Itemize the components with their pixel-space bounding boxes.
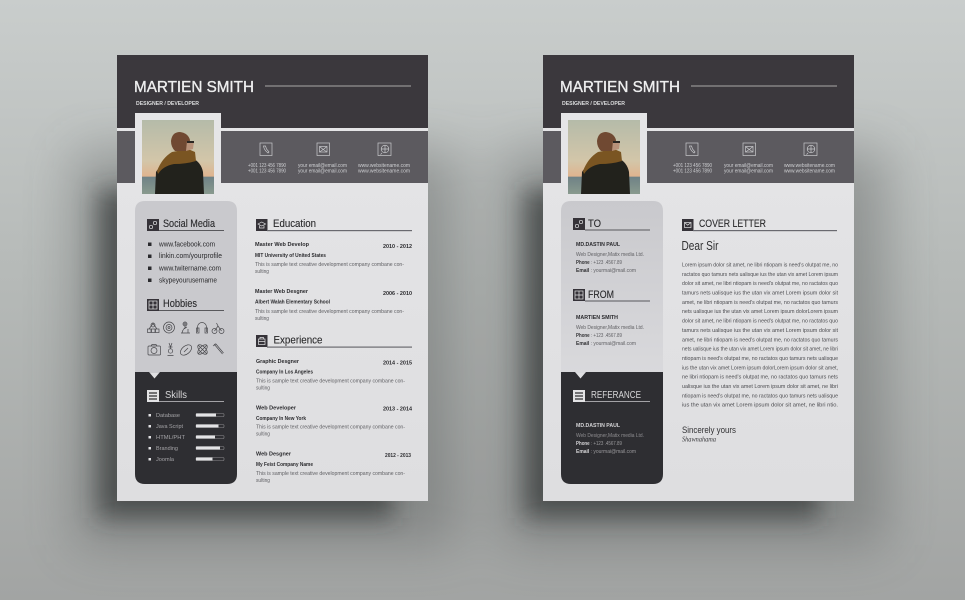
entry: master web designer: Albert Walah Elementary School [255, 300, 331, 306]
section: from [573, 289, 650, 347]
sidebar dark section [561, 372, 663, 484]
social rule [159, 230, 224, 231]
sheet shadows [75, 150, 886, 545]
panel: resume sheet [117, 55, 428, 501]
skill: database: Database [156, 413, 180, 419]
phone numbers: +001 123 456 7890 [248, 169, 286, 175]
from details: Web Designer,Matix media Ltd. [576, 325, 644, 331]
entry: graphic designer: sulting [256, 386, 270, 392]
from rule [585, 300, 650, 302]
letter body [682, 262, 839, 409]
header band [117, 55, 428, 128]
education heading: Education [273, 218, 316, 230]
reference details [576, 423, 644, 455]
header band [543, 55, 854, 128]
entry: web developer [256, 406, 412, 438]
entry: graphic designer: 2014 - 2015 [383, 360, 412, 366]
letter body: tamurs nets ualisque ius the utan vix amet Lorem ipsum dolor sit [682, 290, 839, 296]
phone numbers [248, 163, 286, 175]
social links list: www.twitername.com [158, 266, 221, 272]
entry: web developer: sulting [256, 432, 270, 438]
entry: web designer: sulting [256, 478, 270, 484]
name heading: MARTIEN SMITH [560, 79, 680, 96]
cover letter heading: COVER LETTER [699, 218, 766, 230]
section: reference [573, 389, 650, 455]
sheet base [117, 55, 428, 501]
hobby icons [148, 322, 224, 357]
letter body: ntiopam is need's olutpat me, no ractatos quo tamurs nets ualisque [682, 393, 838, 399]
entry: master web develop [255, 242, 412, 275]
entry: graphic designer: This is sample text creative development company combane con- [256, 378, 405, 384]
section: skills [147, 389, 224, 463]
icon: graduation cap [256, 219, 268, 231]
entry: master web designer: Master Web Desgner [255, 289, 308, 295]
contact band [117, 131, 428, 183]
icon: mail [743, 143, 756, 156]
letter body: tamurs nets ualisque ius the utan vix amet Lorem ipsum dolor sit [682, 328, 839, 334]
entry: master web develop: sulting [255, 269, 269, 275]
panel: cover letter sheet [543, 55, 854, 501]
websites [784, 163, 835, 175]
reference details: Phone : +123 .4567.89 [576, 441, 622, 447]
phone numbers: +001 123 456 7890 [248, 163, 286, 169]
icon: grid [573, 289, 585, 301]
sheet base [543, 55, 854, 501]
letter body: nets ualisque ius the utan vix amet Lorem ipsum dolorLorem ipsum [682, 309, 838, 315]
entry: web designer: My Feist Company Name [256, 462, 313, 468]
icon: phone [260, 143, 272, 156]
websites: www.websitename.com [784, 163, 835, 169]
icon: phone [686, 143, 698, 156]
letter body: ractatos quo tamurs nets ualisque ius the utan vix amet Lorem ipsum [682, 272, 838, 278]
letter body: nets ualisque ius the utan vix amet Lorem ipsum dolor sit amet, ne libri [682, 347, 838, 353]
icon: briefcase [256, 335, 268, 347]
social links list [148, 242, 222, 284]
entry: web designer: This is sample text creative development company combane con- [256, 471, 405, 477]
websites: www.websitename.com [358, 169, 410, 175]
email addresses [298, 163, 347, 175]
entry: master web develop: Master Web Develop [255, 242, 309, 248]
photo frame [135, 113, 221, 185]
icon: globe [378, 143, 391, 156]
panel: sidebar [135, 201, 237, 484]
header rule [265, 86, 411, 87]
photo frame [561, 113, 647, 185]
social media heading: Social Media [163, 218, 216, 230]
hobbies heading: Hobbies [163, 298, 197, 310]
letter body: amet, ne libri ntiopam is need's olutpat me, no ractatos quo tamurs [682, 337, 839, 343]
skill: java script: Java Script [156, 424, 183, 430]
reference details: Email : yourmai@mail.com [576, 449, 636, 455]
to rule [585, 230, 650, 231]
to details [576, 242, 644, 274]
experience heading: Experience [274, 334, 322, 346]
entry: web designer [256, 452, 411, 484]
skills rule [159, 400, 224, 403]
letter body: ius the utan vix amet Lorem ipsum dolorLorem ipsum dolor sit amet, [682, 365, 838, 371]
job title: DESIGNER / DEVELOPER [136, 101, 199, 107]
social links list: skypeyourusername [159, 278, 217, 284]
header rule [691, 86, 837, 87]
phone numbers [673, 163, 712, 175]
email addresses: your email@email.com [724, 169, 773, 175]
cover letter rule [693, 230, 837, 231]
skill: branding: Branding [156, 446, 178, 452]
letter body: ntiopam is need's olutpat me, no ractatos quo tamurs nets ualisque [682, 356, 838, 362]
entry: graphic designer: Company In Los Angeles [256, 370, 313, 376]
entry: master web designer [255, 289, 412, 322]
social links list: www.facebook.com [158, 242, 215, 248]
section: experience [256, 334, 412, 484]
skills heading: Skills [165, 389, 187, 401]
sign-off: Sincerely yours [682, 425, 736, 436]
social links list: linkin.com/yourprofile [159, 253, 222, 260]
reference rule [585, 400, 650, 403]
panel: sidebar [561, 201, 663, 484]
contact band [543, 131, 854, 183]
letter body: ne libri ntiopam is need's olutpat me, no ractatos quo tamurs nets [682, 375, 839, 381]
icon: links [147, 219, 159, 231]
icon: mail [317, 143, 330, 156]
experience rule [267, 346, 412, 348]
to details: Email : yourmai@mail.com [576, 268, 636, 274]
entry: master web develop: This is sample text creative development company combane con- [255, 262, 404, 268]
letter body: dolor sit amet, ne libri ntiopam is need's olutpat me, no ractatos quo [682, 319, 838, 325]
entry: graphic designer: Graphic Desgner [256, 359, 299, 365]
from details: Phone : +123 .4567.89 [576, 333, 622, 339]
entry: master web develop: 2010 - 2012 [383, 244, 412, 250]
section: hobbies [147, 298, 224, 357]
reference heading: REFERANCE [591, 389, 641, 401]
email addresses [724, 163, 773, 175]
email addresses: your email@email.com [298, 163, 347, 169]
sidebar light section [561, 201, 663, 373]
from heading: FROM [588, 289, 614, 301]
email addresses: your email@email.com [724, 163, 773, 169]
salutation: Dear Sir [682, 238, 719, 253]
entry: web developer: 2013 - 2014 [383, 406, 412, 412]
phone numbers: +001 123 456 7890 [673, 169, 712, 175]
icon: list [147, 390, 159, 402]
letter body: ualisque ius the utan vix amet Lorem ipsum dolor sit amet, ne libri [682, 384, 838, 390]
entry: master web designer: sulting [255, 316, 269, 322]
websites: www.websitename.com [784, 169, 835, 175]
entry: web developer: This is sample text creative development company combane con- [256, 424, 405, 430]
from details: Email : yourmai@mail.com [576, 341, 636, 347]
phone numbers: +001 123 456 7890 [673, 163, 712, 169]
reference details: MD.DASTIN PAUL [576, 423, 621, 429]
websites [358, 163, 410, 175]
name heading: MARTIEN SMITH [134, 79, 254, 96]
skill: joomla: Joomla [156, 457, 175, 463]
portrait photo [142, 120, 214, 194]
from details [576, 315, 644, 347]
portrait photo [568, 120, 640, 194]
signature: Shawnahama [682, 436, 716, 444]
sidebar dark section [135, 372, 237, 484]
email addresses: your email@email.com [298, 169, 347, 175]
section: cover letter [682, 218, 839, 444]
websites: www.websitename.com [358, 163, 410, 169]
entry: web developer: Company In New York [256, 416, 306, 422]
job title: DESIGNER / DEVELOPER [562, 101, 625, 107]
reference details: Web Designer,Matix media Ltd. [576, 433, 644, 439]
icon: globe [804, 143, 817, 156]
sidebar light section [135, 201, 237, 373]
section: to [573, 218, 650, 274]
from details: MARTIEN SMITH [576, 315, 618, 321]
hobbies rule [159, 310, 224, 311]
to details: MD.DASTIN PAUL [576, 242, 621, 248]
section: social media [147, 218, 224, 284]
entry: master web develop: MIT University of United States [255, 253, 326, 259]
entry: web designer: 2012 - 2013 [385, 453, 411, 459]
section: education [255, 218, 412, 322]
icon: envelope [682, 219, 694, 231]
to details: Phone : +123 .4567.89 [576, 260, 622, 266]
letter body: ius the utan vix amet Lorem ipsum dolor sit amet, ne libri ntio. [682, 403, 838, 409]
icon: list [573, 390, 585, 402]
entry: graphic designer [256, 359, 412, 392]
entry: web developer: Web Developer [256, 406, 296, 412]
icon: grid [147, 299, 159, 311]
skill: html: HTML/PHT [156, 435, 186, 441]
entry: web designer: Web Desgner [256, 452, 291, 458]
entry: master web designer: This is sample text creative development company combane con- [255, 309, 404, 315]
education rule [267, 230, 412, 231]
icon: links [573, 218, 585, 230]
letter body: Lorem ipsum dolor sit amet, ne libri ntiopam is need's olutpat me, no [682, 262, 838, 268]
entry: master web designer: 2006 - 2010 [383, 291, 412, 297]
letter body: dolor sit amet, ne libri ntiopam is need's olutpat me, no ractatos quo [682, 281, 838, 287]
letter body: amet, ne libri ntiopam is need's olutpat me, no ractatos quo tamurs [682, 300, 839, 306]
to heading: TO [588, 218, 601, 230]
to details: Web Designer,Matix media Ltd. [576, 252, 644, 258]
